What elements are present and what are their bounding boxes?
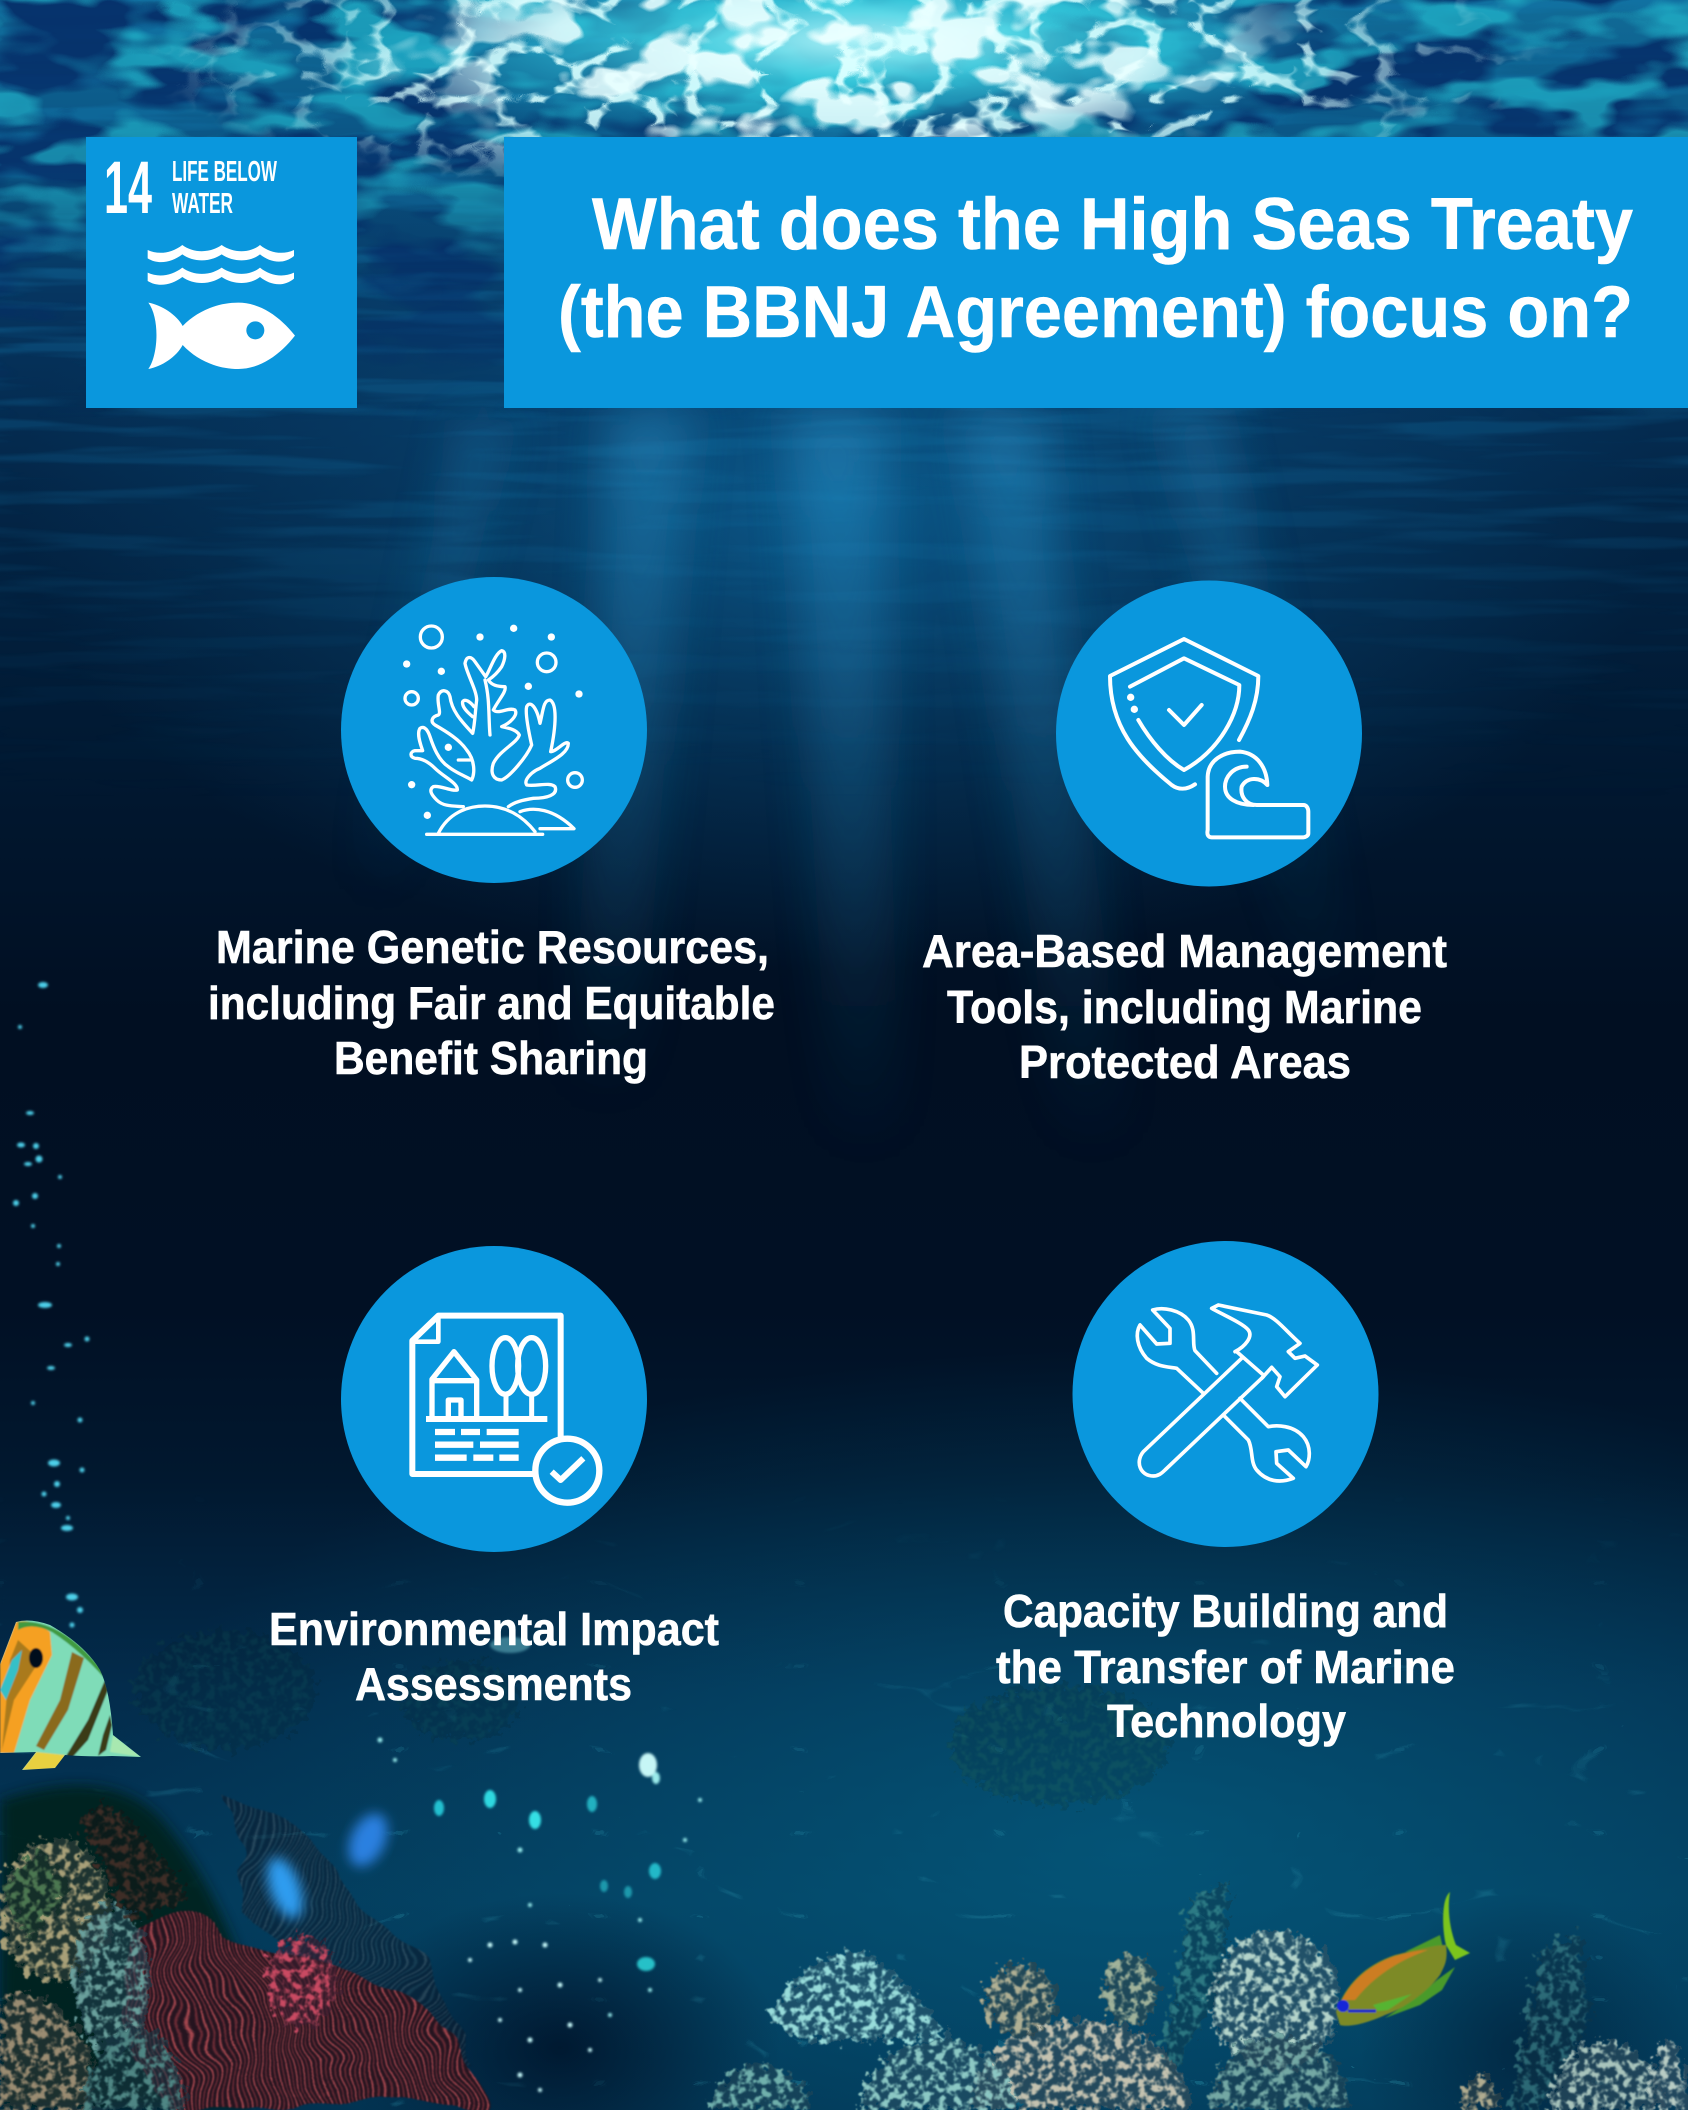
panel: capacity building and technology transfer [996,1241,1455,1747]
icon: assessment document [412,1316,599,1503]
fish: anthias right [1336,1892,1470,2026]
SDG number: 14 [104,146,152,229]
SDG name: WATER [172,188,233,220]
fish: butterflyfish left [0,1615,145,1775]
icon: coral reef [403,625,583,834]
seabed moss patches [135,1630,1170,1805]
label: capacity building: the Transfer of Marine [996,1641,1455,1693]
panel: marine genetic resources [208,577,775,1084]
icon: shield and wave [1110,639,1308,837]
SDG name: LIFE BELOW [172,156,277,188]
label: capacity building [996,1585,1455,1747]
bubbles: centre glowing spots [378,1637,702,2092]
label: marine genetic resources: including Fair and Equitable [208,977,775,1029]
icon: crossed wrench and hammer [1137,1305,1317,1481]
label: environmental impact assessments: Environmental Impact [269,1603,719,1655]
label: area-based management: Area-Based Management [922,925,1447,977]
coral reef: bottom centre and right [710,1880,1688,2110]
label: marine genetic resources: Marine Genetic Resources, [216,921,769,973]
label: area-based management: Tools, including Marine [947,981,1422,1033]
label: area-based management [922,925,1447,1088]
label: environmental impact assessments: Assessments [355,1658,632,1710]
coral reef: bottom left with anemones [0,1785,480,2110]
SDG 14 logo tile [86,137,357,408]
label: environmental impact assessments [269,1603,719,1710]
panel: area-based management tools [922,580,1447,1088]
label: area-based management: Protected Areas [1019,1036,1351,1088]
panel: environmental impact assessments [269,1246,719,1710]
bubbles: left column [13,982,90,1628]
icon: waves and fish [148,245,295,369]
title banner [504,137,1688,408]
label: capacity building: Technology [1107,1695,1346,1747]
SDG name [172,156,277,220]
label: capacity building: Capacity Building and [1003,1585,1448,1637]
title text [558,184,1633,353]
title text: (the BBNJ Agreement) focus on? [558,272,1633,353]
title text: What does the High Seas Treaty [592,184,1633,265]
label: marine genetic resources [208,921,775,1084]
label: marine genetic resources: Benefit Sharing [334,1032,648,1084]
